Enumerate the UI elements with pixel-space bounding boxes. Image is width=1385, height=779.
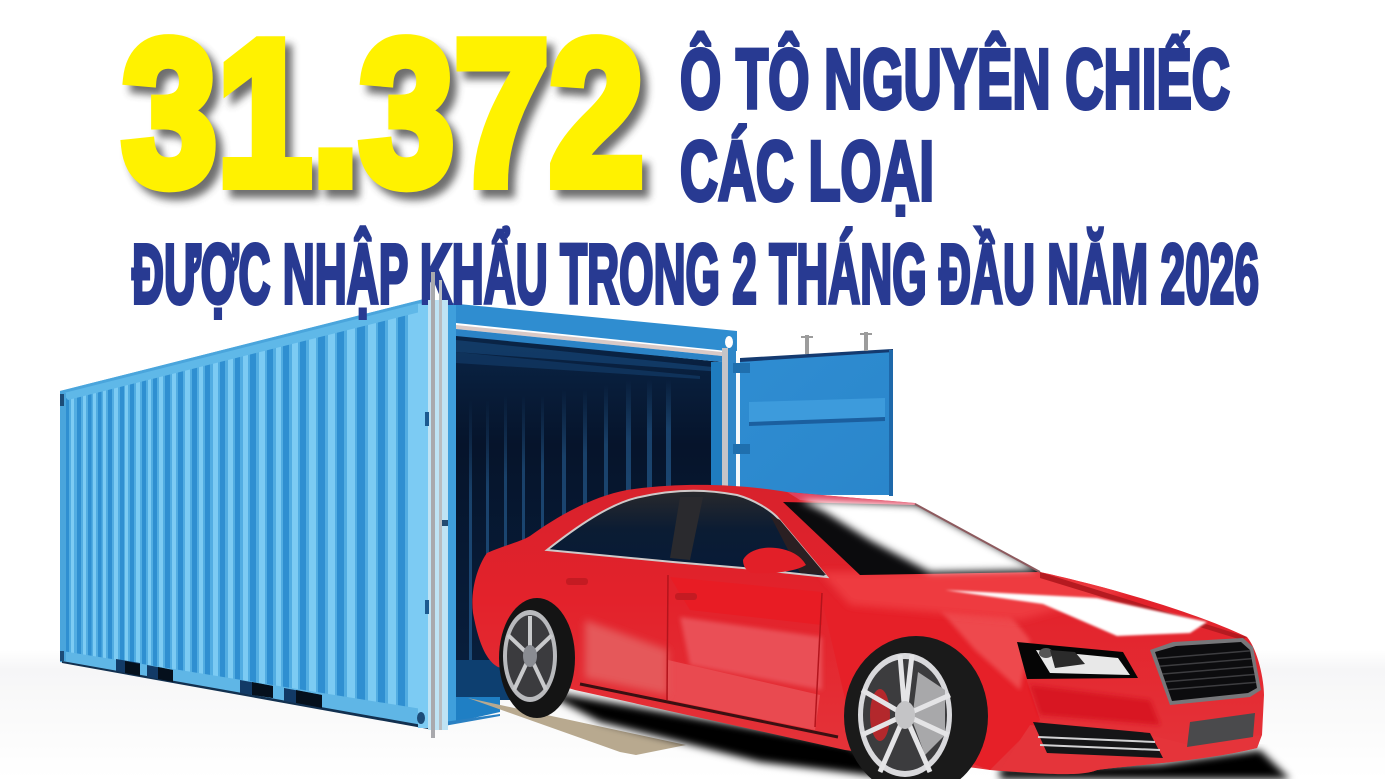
- grille: [1150, 638, 1261, 705]
- mirror: [743, 548, 806, 573]
- container side wall: [60, 298, 428, 740]
- container interior: [456, 335, 722, 722]
- car body: [472, 485, 1264, 774]
- top rail: [60, 298, 428, 400]
- front wheel: [844, 636, 988, 779]
- main number: 31.372: 31.372: [129, 6, 651, 236]
- left corner posts: [60, 393, 66, 661]
- hood highlight: [945, 590, 1207, 636]
- door rods: [805, 335, 809, 354]
- right corner post: [418, 304, 428, 728]
- plate recess: [1187, 713, 1255, 747]
- hinges: [733, 363, 750, 373]
- door frame: [444, 303, 737, 726]
- door band: [749, 398, 885, 424]
- open door: [733, 332, 893, 496]
- windshield: [783, 500, 1040, 575]
- door lock rods: [425, 272, 448, 738]
- side windows: [547, 491, 827, 577]
- container: [60, 298, 893, 740]
- ground shadow: [0, 650, 1385, 779]
- car: [472, 485, 1264, 779]
- floor and sill: [456, 660, 520, 700]
- lower intake: [1033, 722, 1163, 758]
- body reflections: [585, 492, 1260, 772]
- headlight: [1017, 642, 1138, 679]
- rear wheel: [499, 598, 575, 718]
- main number: 31.372: 31.372: [122, 0, 644, 228]
- door seams and handles: [566, 575, 838, 737]
- heading: vehicle type: [680, 32, 1230, 218]
- bottom rail: [62, 651, 428, 727]
- ramp: [468, 698, 686, 755]
- heading: vehicle type: CÁC LOẠI: [680, 124, 934, 218]
- shadow under car: [540, 690, 1290, 779]
- fork pockets: [116, 659, 322, 708]
- interior right wall: [711, 362, 722, 487]
